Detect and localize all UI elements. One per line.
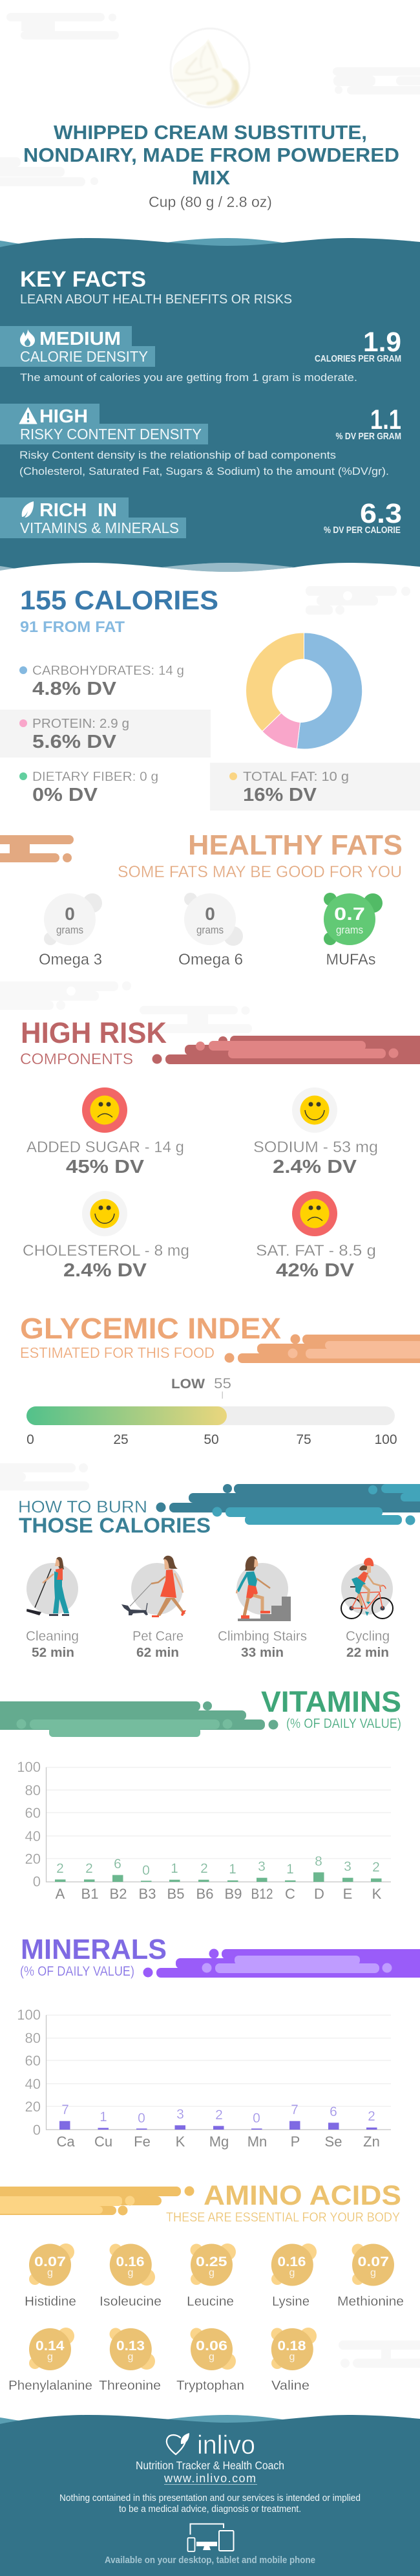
bar chart: minerals: 0	[253, 2111, 260, 2126]
bar chart: minerals: Ca	[56, 2134, 75, 2150]
bar chart: minerals: 40	[25, 2076, 41, 2092]
bar chart: vitamins: 2	[200, 1861, 208, 1876]
label boxes: risky content	[0, 404, 208, 444]
bar chart: vitamins: B3	[139, 1886, 156, 1902]
bubble: mufas: 0.7	[334, 904, 365, 924]
glycemic value label	[171, 1375, 231, 1399]
amino: lysine: Lysine	[272, 2295, 310, 2309]
bar chart: vitamins: 3	[344, 1859, 352, 1874]
footer wave	[0, 2415, 420, 2436]
burn background cloud	[0, 1463, 89, 1490]
risk item: saturated fat	[256, 1191, 376, 1281]
bubble: omega 6: Omega 6	[178, 951, 243, 968]
bar chart: minerals: 20	[25, 2099, 41, 2115]
amino: lysine: g	[289, 2267, 295, 2278]
risk item: added sugar	[26, 1087, 184, 1177]
burn heading line 2: THOSE CALORIES	[19, 1514, 211, 1537]
description: risky content	[19, 449, 389, 477]
title: NONDAIRY, MADE FROM POWDERED	[23, 144, 399, 166]
bubble: mufas	[324, 893, 383, 968]
rating: rich in: RICH IN	[39, 500, 117, 521]
icon: warning triangle	[19, 408, 37, 424]
title	[23, 121, 399, 189]
risk item: sodium: 2.4% DV	[273, 1157, 357, 1177]
activity: cycling: Cycling	[346, 1629, 390, 1644]
amino: isoleucine: 0.16	[116, 2254, 145, 2269]
amino: leucine	[187, 2243, 236, 2309]
disclaimer: Nothing contained in this presentation and our services is intended or implied	[59, 2493, 361, 2504]
bar chart: minerals: 2	[368, 2109, 375, 2124]
donut chart: macronutrients	[246, 633, 362, 749]
serving size: Cup (80 g / 2.8 oz)	[149, 193, 272, 210]
glycemic axis labels: 75	[296, 1432, 311, 1447]
glycemic value label: 55	[214, 1375, 231, 1392]
title: MIX	[192, 166, 230, 189]
amino acids heading: AMINO ACIDS	[204, 2180, 401, 2211]
amino: methionine: 0.07	[358, 2254, 389, 2269]
bar chart: minerals: 7	[291, 2102, 299, 2117]
legend: dietary fiber	[19, 769, 158, 805]
risk item: cholesterol	[23, 1191, 189, 1281]
wave: key facts top	[0, 238, 420, 259]
panel: footer	[0, 2430, 420, 2576]
bar chart: vitamins: 0	[33, 1873, 41, 1890]
bar chart: vitamins: 20	[25, 1851, 41, 1867]
food image: whipped cream	[171, 28, 249, 107]
bar chart: vitamins: 2	[372, 1860, 380, 1875]
amino: threonine: 0.13	[116, 2339, 145, 2353]
bar chart: vitamins: 1	[286, 1862, 294, 1877]
amino: methionine: Methionine	[337, 2295, 404, 2309]
glycemic subheading: ESTIMATED FOR THIS FOOD	[20, 1344, 215, 1361]
amino: tryptophan	[176, 2328, 244, 2393]
description: calorie density: The amount of calories you are getting from 1 gram is moderate.	[20, 371, 357, 384]
minerals subheading: (% OF DAILY VALUE)	[20, 1964, 134, 1979]
disclaimer	[59, 2493, 361, 2515]
minerals cloud	[143, 1948, 420, 1978]
bar chart: minerals: Fe	[134, 2134, 151, 2150]
bar chart: vitamins: 80	[25, 1782, 41, 1798]
burn cloud	[156, 1484, 420, 1525]
bubble: omega 3	[39, 893, 102, 968]
bar chart: vitamins: 8	[315, 1854, 322, 1869]
bar chart: minerals: Zn	[363, 2134, 380, 2150]
bar chart: minerals: Cu	[94, 2134, 112, 2150]
bar chart: minerals: P	[291, 2134, 300, 2150]
bubble: mufas: grams	[336, 924, 363, 936]
bar chart: vitamins: B9	[225, 1886, 242, 1902]
amino: isoleucine: Isoleucine	[100, 2295, 162, 2309]
bar chart: vitamins: C	[285, 1886, 295, 1902]
glycemic axis labels: 50	[204, 1432, 219, 1447]
glycemic axis labels: 0	[26, 1432, 34, 1447]
bar chart: vitamins: 2	[56, 1861, 64, 1876]
activity: climbing stairs	[218, 1556, 307, 1660]
legend: protein: 5.6% DV	[32, 732, 117, 752]
amino: phenylalanine: 0.14	[36, 2339, 65, 2353]
vitamins heading: VITAMINS	[261, 1685, 401, 1718]
glycemic value label: LOW	[171, 1377, 205, 1392]
label: risky content density: RISKY CONTENT DENSITY	[20, 426, 202, 442]
glycemic axis labels: 25	[113, 1432, 129, 1447]
rating: high: HIGH	[39, 406, 88, 427]
legend: protein: PROTEIN: 2.9 g	[32, 716, 129, 731]
amino: leucine: 0.25	[196, 2254, 227, 2269]
amino: histidine: g	[47, 2267, 53, 2278]
activity: cycling	[341, 1558, 393, 1660]
bar chart: minerals: Mg	[209, 2134, 229, 2150]
bubble: omega 6	[178, 893, 243, 968]
risk item: saturated fat: 42% DV	[276, 1260, 355, 1281]
glycemic scale bar	[26, 1406, 395, 1425]
legend: carbohydrates	[19, 663, 184, 699]
bubble: omega 6: grams	[196, 924, 224, 936]
bar chart: vitamins: B6	[196, 1886, 213, 1902]
amino: phenylalanine: Phenylalanine	[8, 2379, 92, 2393]
title: WHIPPED CREAM SUBSTITUTE,	[54, 121, 367, 144]
rating: medium: MEDIUM	[39, 329, 121, 349]
bar chart: vitamins	[17, 1759, 391, 1902]
unit: dv per calorie: % DV PER CALORIE	[324, 525, 401, 536]
legend: total fat	[210, 763, 420, 811]
activity: cleaning: 52 min	[32, 1646, 74, 1660]
amino: valine: g	[289, 2352, 295, 2363]
bar chart: vitamins: B1	[81, 1886, 98, 1902]
activity: cycling: 22 min	[346, 1646, 389, 1660]
bar chart: minerals: Mn	[247, 2134, 267, 2150]
bar chart: vitamins: 1	[229, 1862, 236, 1877]
amino: threonine	[99, 2328, 161, 2393]
vitamins cloud	[0, 1701, 278, 1737]
bar chart: vitamins: D	[314, 1886, 324, 1902]
legend: total fat: TOTAL FAT: 10 g	[243, 769, 349, 784]
description: risky content: Risky Content density is the relationship of bad components	[19, 449, 336, 461]
amino: tryptophan: Tryptophan	[176, 2379, 244, 2393]
key facts heading: KEY FACTS	[20, 267, 146, 292]
bubble: omega 6: 0	[205, 904, 215, 924]
legend: total fat: 16% DV	[243, 785, 317, 805]
activity: pet care	[121, 1556, 186, 1660]
bar chart: vitamins: 40	[25, 1828, 41, 1844]
amino: threonine: g	[128, 2352, 133, 2363]
healthy fats subheading: SOME FATS MAY BE GOOD FOR YOU	[118, 863, 402, 881]
bar chart: vitamins: B2	[110, 1886, 127, 1902]
glycemic cloud	[225, 1334, 420, 1363]
activity: climbing stairs: 33 min	[241, 1646, 284, 1660]
vitamins subheading: (% OF DAILY VALUE)	[286, 1716, 401, 1731]
amino: lysine: 0.16	[278, 2254, 306, 2269]
unit: calories per gram: CALORIES PER GRAM	[315, 354, 401, 364]
label: calorie density: CALORIE DENSITY	[20, 348, 148, 365]
risk item: saturated fat: SAT. FAT - 8.5 g	[256, 1242, 376, 1260]
bar chart: vitamins: 3	[258, 1859, 266, 1874]
amino: isoleucine: g	[128, 2267, 133, 2278]
icon: flame	[20, 329, 35, 347]
bar chart: vitamins: 0	[142, 1863, 150, 1878]
bar chart: minerals: 3	[176, 2107, 184, 2122]
bar chart: minerals: 1	[100, 2110, 107, 2124]
bar chart: minerals: 60	[25, 2053, 41, 2069]
amino acids cloud	[0, 2187, 194, 2215]
bubble: omega 3: grams	[56, 924, 83, 936]
label boxes: calorie density	[0, 326, 155, 367]
amino: valine: Valine	[271, 2379, 310, 2393]
disclaimer: to be a medical advice, diagnosis or treatment.	[119, 2504, 301, 2515]
tagline: Nutrition Tracker & Health Coach	[136, 2459, 284, 2472]
burn heading line 1: HOW TO BURN	[18, 1497, 147, 1516]
logo: heart and leaf	[167, 2433, 189, 2454]
activity: pet care: 62 min	[136, 1646, 179, 1660]
risk item: sodium: SODIUM - 53 mg	[253, 1139, 378, 1156]
bar chart: minerals: 80	[25, 2030, 41, 2046]
bubble: mufas: MUFAs	[326, 951, 376, 968]
activity: cleaning	[26, 1557, 79, 1660]
key facts subheading: LEARN ABOUT HEALTH BENEFITS OR RISKS	[20, 292, 292, 307]
amino: methionine	[337, 2243, 404, 2309]
minerals heading: MINERALS	[21, 1934, 167, 1965]
icon: devices	[187, 2524, 234, 2551]
amino: histidine: Histidine	[25, 2295, 76, 2309]
key facts bottom wave	[0, 563, 420, 584]
bubble: omega 3: 0	[65, 904, 75, 924]
legend: protein	[0, 710, 211, 758]
unit: dv per gram: % DV PER GRAM	[336, 431, 401, 442]
bubble: omega 3: Omega 3	[39, 951, 102, 968]
amino: isoleucine	[100, 2243, 162, 2309]
high risk subheading: COMPONENTS	[20, 1051, 133, 1068]
amino: leucine: Leucine	[187, 2295, 234, 2309]
legend: dietary fiber: 0% DV	[32, 785, 98, 805]
footer background cloud	[339, 2341, 420, 2368]
activity: climbing stairs: Climbing Stairs	[218, 1629, 307, 1644]
label boxes: vitamins and minerals	[0, 497, 186, 538]
value: 1.1: 1.1	[370, 404, 401, 435]
bar chart: minerals: 7	[61, 2102, 69, 2117]
amino: tryptophan: g	[209, 2352, 215, 2363]
amino: valine	[271, 2328, 317, 2393]
calories heading: 155 CALORIES	[20, 585, 218, 615]
bar chart: vitamins: B12	[251, 1886, 273, 1902]
bar chart: vitamins: 1	[171, 1861, 178, 1876]
bar chart: minerals	[17, 2007, 391, 2150]
risk item: cholesterol: 2.4% DV	[63, 1260, 147, 1281]
bar chart: vitamins: 6	[114, 1857, 121, 1872]
bar chart: minerals: 6	[330, 2104, 337, 2119]
risk item: added sugar: ADDED SUGAR - 14 g	[26, 1139, 184, 1156]
amino: lysine	[271, 2243, 317, 2309]
legend: dietary fiber: DIETARY FIBER: 0 g	[32, 769, 158, 784]
amino: leucine: g	[209, 2267, 215, 2278]
bar chart: minerals: Se	[325, 2134, 342, 2150]
legend: carbohydrates: 4.8% DV	[32, 679, 117, 699]
amino: histidine: 0.07	[34, 2254, 66, 2269]
activity: pet care: Pet Care	[132, 1629, 184, 1644]
bar chart: minerals: 2	[215, 2108, 223, 2123]
amino: phenylalanine: g	[47, 2352, 53, 2363]
bar chart: vitamins: E	[343, 1886, 352, 1902]
availability note: Available on your desktop, tablet and mobile phone	[105, 2555, 315, 2566]
bar chart: minerals: 0	[33, 2122, 41, 2138]
high risk heading: HIGH RISK	[21, 1016, 167, 1049]
glycemic heading: GLYCEMIC INDEX	[20, 1312, 281, 1345]
website: www.inlivo.com	[163, 2472, 256, 2485]
amino: valine: 0.18	[278, 2339, 306, 2353]
amino: histidine	[25, 2243, 76, 2309]
icon: leaf	[22, 501, 34, 518]
bar chart: minerals: 0	[138, 2111, 145, 2126]
header background clouds	[0, 13, 420, 186]
amino: methionine: g	[370, 2267, 376, 2278]
bar chart: vitamins: B5	[167, 1886, 184, 1902]
value: 6.3: 6.3	[360, 498, 402, 529]
activity: cleaning: Cleaning	[26, 1629, 79, 1644]
amino: phenylalanine	[8, 2328, 92, 2393]
glycemic axis labels	[26, 1432, 397, 1447]
logo: wordmark: inlivo	[197, 2430, 255, 2460]
amino: tryptophan: 0.06	[196, 2339, 227, 2353]
glycemic axis labels: 100	[374, 1432, 397, 1447]
bar chart: vitamins: K	[372, 1886, 382, 1902]
value: 1.9: 1.9	[363, 327, 401, 358]
bar chart: vitamins: 2	[85, 1861, 93, 1876]
bar chart: vitamins: 60	[25, 1805, 41, 1821]
legend: carbohydrates: CARBOHYDRATES: 14 g	[32, 663, 184, 678]
risk item: cholesterol: CHOLESTEROL - 8 mg	[23, 1242, 189, 1260]
calories background cloud	[306, 586, 410, 615]
high risk cloud	[152, 1036, 420, 1064]
bar chart: minerals: K	[176, 2134, 185, 2150]
panel: key facts	[0, 257, 420, 584]
calories from fat: 91 FROM FAT	[20, 618, 125, 636]
label: vitamins and minerals: VITAMINS & MINERALS	[20, 519, 179, 536]
bar chart: minerals: 100	[17, 2007, 41, 2023]
bar chart: vitamins: 100	[17, 1759, 41, 1775]
healthy fats heading: HEALTHY FATS	[188, 829, 403, 861]
high risk background clouds	[0, 981, 252, 1033]
risk item: sodium	[253, 1087, 378, 1177]
amino: threonine: Threonine	[99, 2379, 161, 2393]
risk item: added sugar: 45% DV	[66, 1157, 145, 1177]
healthy fats cloud	[0, 835, 74, 862]
bar chart: vitamins: A	[56, 1886, 65, 1902]
description: risky content: (Cholesterol, Saturated Fat, Sugars & Sodium) to the amount (%DV/gr).	[19, 465, 389, 477]
